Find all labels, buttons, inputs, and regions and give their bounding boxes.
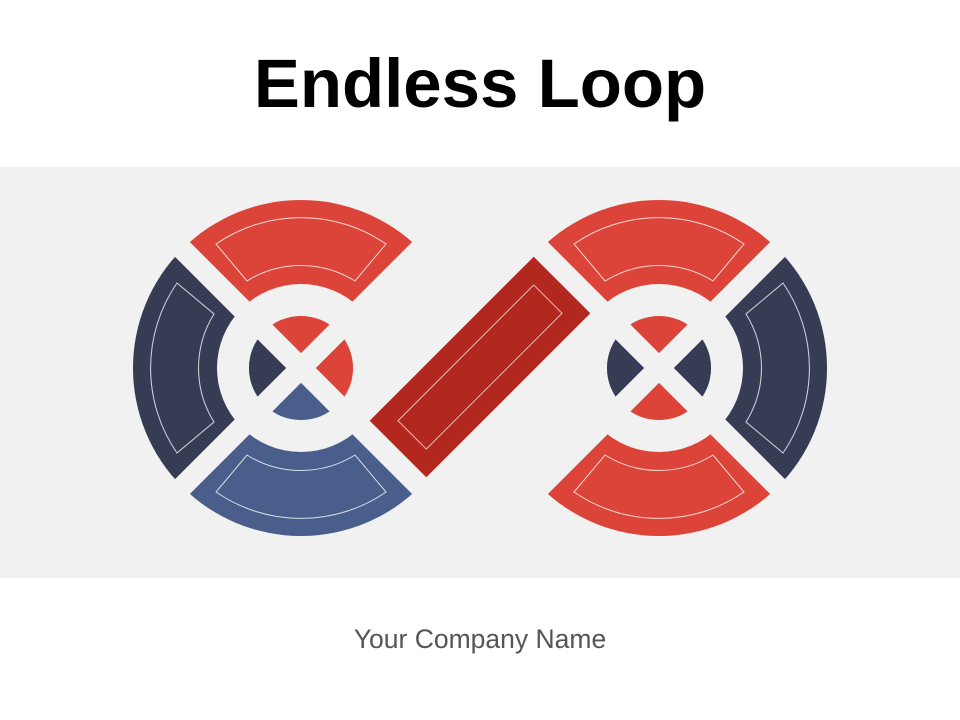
- right loop: [524, 200, 827, 536]
- subtitle: Your Company Name: [354, 624, 606, 654]
- left loop: [133, 200, 436, 536]
- middle bar: [370, 257, 590, 477]
- title: Endless Loop: [254, 45, 706, 122]
- background band: [0, 167, 960, 578]
